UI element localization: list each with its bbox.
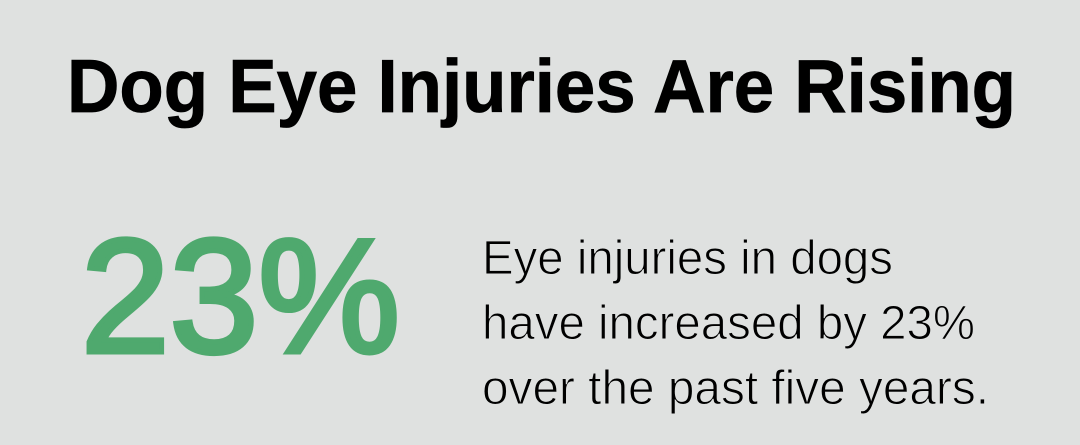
description text bbox=[482, 232, 989, 415]
description text: over the past five years. bbox=[482, 362, 989, 415]
description text: have increased by 23% bbox=[482, 297, 975, 350]
description text: Eye injuries in dogs bbox=[482, 232, 893, 285]
title: Dog Eye Injuries Are Rising bbox=[67, 44, 1016, 128]
big statistic: 23%: 23% bbox=[81, 206, 400, 387]
